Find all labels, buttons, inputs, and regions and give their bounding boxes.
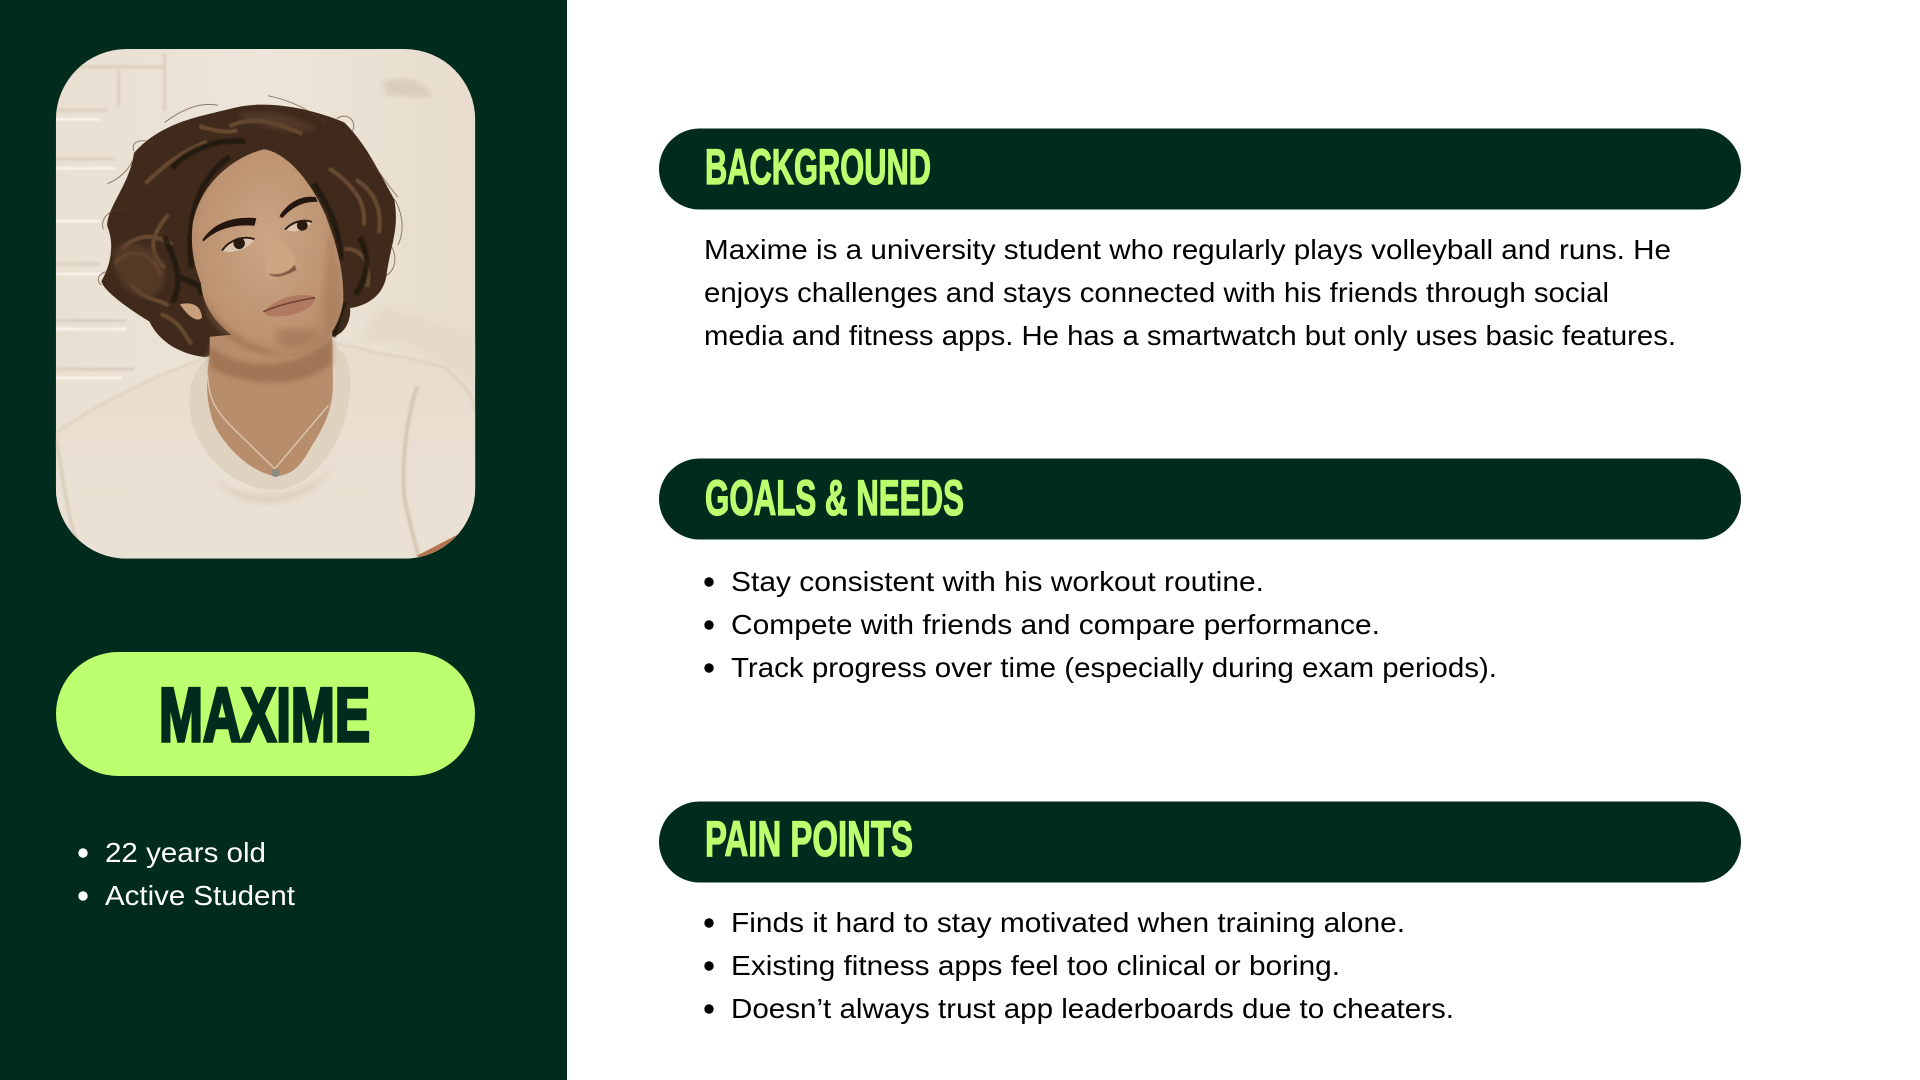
panel: goals and needs [659, 458, 1741, 683]
necklace [207, 373, 328, 469]
background text [704, 234, 1676, 351]
t-shirt [56, 342, 475, 559]
photo: portrait of Maxime [56, 49, 475, 562]
background text: enjoys challenges and stays connected with his friends through social [704, 277, 1609, 308]
goals list: Stay consistent with his workout routine. [731, 566, 1264, 597]
sleeve shading [403, 386, 419, 559]
pain points header: PAIN POINTS [705, 811, 913, 867]
name: MAXIME [159, 673, 370, 758]
ear [180, 303, 202, 320]
goals header [659, 458, 1741, 540]
panel: background [659, 128, 1741, 351]
eyes [221, 238, 254, 252]
pain points list: Finds it hard to stay motivated when training alone. [731, 907, 1405, 938]
neck [207, 325, 333, 476]
name pill [56, 652, 475, 776]
goals list [704, 566, 1497, 683]
goals header: GOALS & NEEDS [705, 470, 964, 526]
background header [659, 128, 1741, 210]
collar [189, 342, 350, 490]
panel: sidebar [0, 0, 567, 1080]
hair [98, 96, 402, 358]
pain points header [659, 802, 1741, 882]
goals list: Track progress over time (especially during exam periods). [731, 652, 1497, 683]
goals list: Compete with friends and compare performance. [731, 609, 1380, 640]
eyebrows [202, 218, 256, 241]
arm [417, 534, 458, 557]
nose [288, 262, 294, 270]
profile facts list: Active Student [105, 880, 295, 911]
pain points list: Existing fitness apps feel too clinical or boring. [731, 950, 1340, 981]
background header: BACKGROUND [705, 139, 931, 195]
pain points list: Doesn’t always trust app leaderboards due to cheaters. [731, 993, 1454, 1024]
background text: Maxime is a university student who regularly plays volleyball and runs. He [704, 234, 1671, 265]
background text: media and fitness apps. He has a smartwatch but only uses basic features. [704, 320, 1676, 351]
pain points list [704, 907, 1454, 1024]
profile facts list: 22 years old [105, 837, 266, 868]
profile facts list [78, 837, 295, 911]
mouth [263, 295, 315, 316]
face [192, 149, 343, 357]
panel: pain points [659, 802, 1741, 1024]
